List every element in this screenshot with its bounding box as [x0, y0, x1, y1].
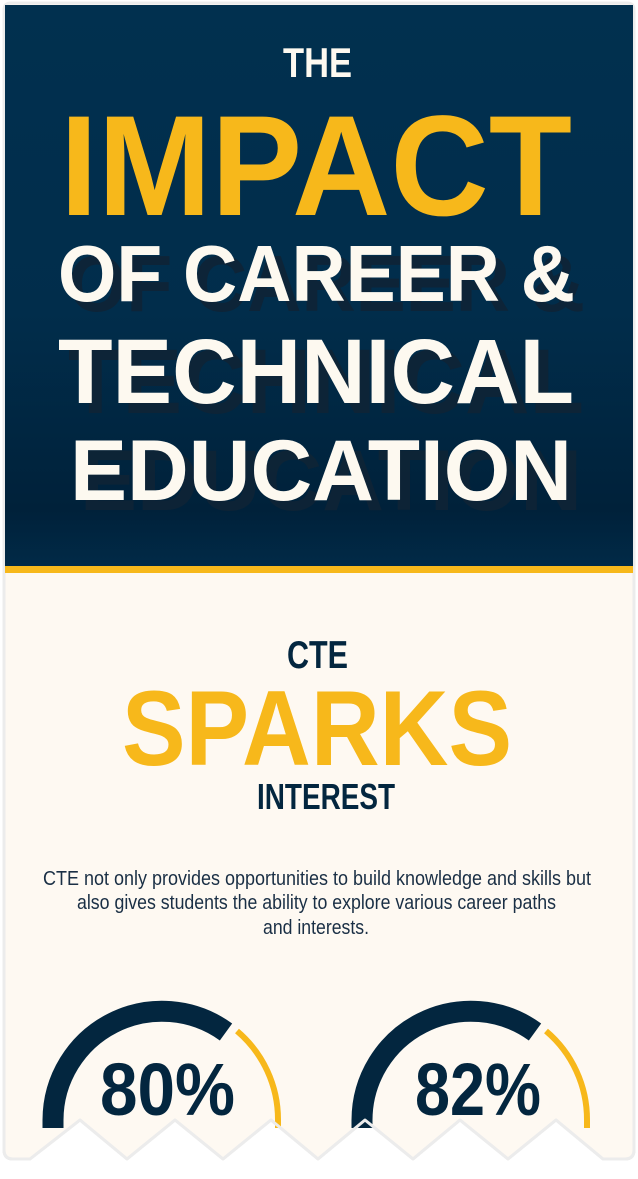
heading: CTE SPARKS INTEREST: SPARKS: [122, 668, 512, 788]
gauge: 82%: [362, 1011, 587, 1131]
gauge: 80%: [53, 1011, 278, 1131]
paragraph: also gives students the ability to explore various career paths: [77, 892, 556, 914]
title: IMPACT: IMPACT: [60, 87, 572, 246]
title: OF CAREER & TECHNICAL EDUCATION: OF CAREER &: [58, 229, 575, 318]
paragraph: [43, 868, 591, 939]
yellow divider: [5, 566, 633, 573]
title: OF CAREER & TECHNICAL EDUCATION: TECHNICAL: [58, 321, 574, 423]
title: THE: THE: [283, 39, 352, 86]
title: OF CAREER & TECHNICAL EDUCATION: [58, 229, 575, 519]
heading: CTE SPARKS INTEREST: INTEREST: [257, 776, 395, 817]
header panel: [5, 5, 633, 566]
heading: CTE SPARKS INTEREST: CTE: [287, 634, 348, 677]
paragraph: CTE not only provides opportunities to build knowledge and skills but: [43, 868, 591, 890]
heading: CTE SPARKS INTEREST: [122, 634, 512, 817]
gauge: 80%: 80%: [100, 1048, 235, 1131]
title shadows: EDUCATION: [80, 433, 582, 529]
title shadows: [68, 239, 585, 529]
title shadows: TECHNICAL: [68, 331, 584, 433]
title shadows: OF CAREER &: [68, 239, 585, 328]
title: OF CAREER & TECHNICAL EDUCATION: EDUCATION: [70, 423, 572, 519]
paragraph: and interests.: [263, 917, 369, 939]
gauge: 82%: 82%: [415, 1048, 541, 1131]
zigzag edge overlay: [4, 1120, 634, 1159]
